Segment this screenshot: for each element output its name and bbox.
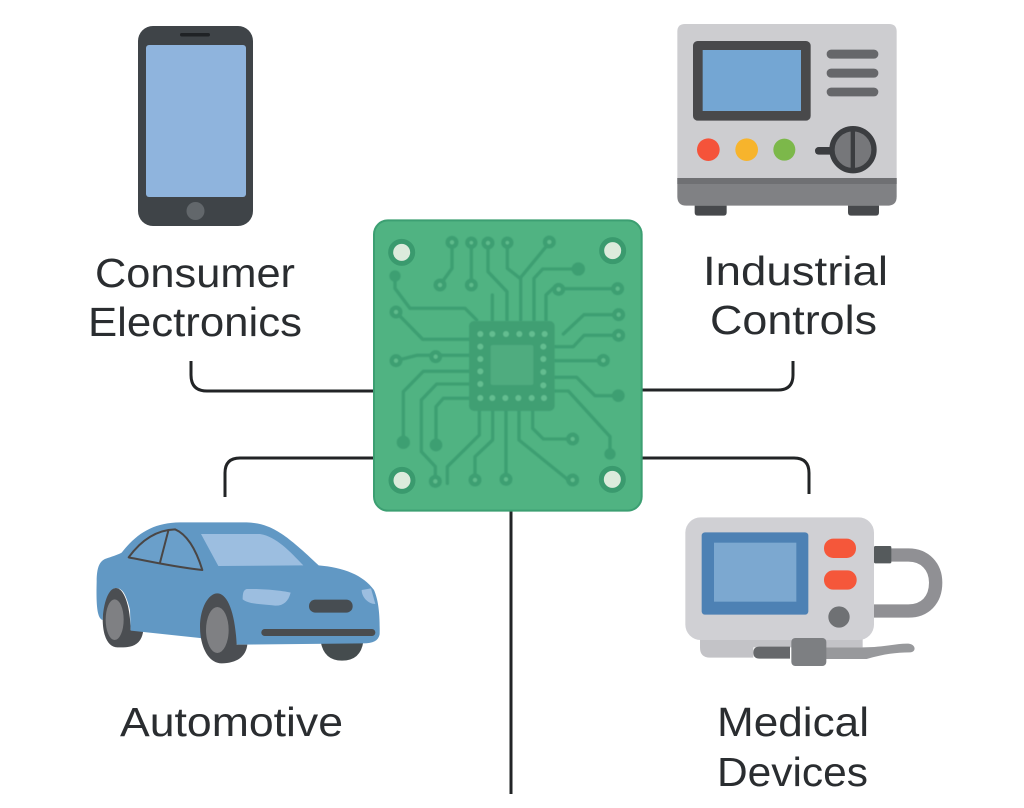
phone screen (146, 45, 246, 197)
phone speaker (180, 33, 210, 36)
chip package (469, 321, 555, 411)
controller base (677, 178, 897, 206)
orange buttons (824, 539, 856, 558)
vent lines (827, 50, 878, 96)
connector lines (191, 361, 809, 794)
trace pads (392, 238, 623, 486)
probe lead (753, 647, 790, 659)
round knob (828, 606, 850, 628)
label: automotive: Automotive (120, 699, 343, 745)
label: industrial controls (703, 248, 888, 343)
cable connector (874, 546, 891, 563)
front wheel (200, 593, 247, 663)
headlight right (362, 588, 375, 604)
label: medical devices (717, 699, 869, 795)
control dial (815, 129, 874, 171)
mounting holes (391, 240, 624, 491)
headlight left (243, 589, 291, 606)
grille (309, 600, 353, 613)
microchip (469, 321, 555, 411)
label: consumer electronics (88, 250, 302, 345)
label: industrial controls: Industrial (703, 248, 888, 294)
circuit traces (395, 243, 618, 483)
label: medical devices: Medical (717, 699, 869, 745)
controller body (677, 24, 897, 178)
connector: bottom vertical (510, 511, 512, 794)
connector: medical devices (642, 458, 809, 494)
icon: medical device (685, 517, 936, 666)
icon: smartphone (138, 26, 253, 226)
rear wheel (103, 588, 143, 647)
central circuit board (374, 220, 642, 511)
probe clip (791, 638, 826, 666)
phone home button (186, 202, 204, 220)
bumper strip (261, 629, 375, 636)
device base (700, 633, 863, 658)
far front wheel (321, 642, 363, 661)
chip contacts (477, 331, 548, 401)
controller feet (695, 206, 727, 216)
side windows (129, 529, 202, 570)
car body (97, 522, 380, 645)
device screen (702, 532, 808, 615)
front hubcap (206, 607, 229, 653)
icon: industrial controller (677, 24, 897, 216)
board body (374, 220, 642, 511)
indicator lights (697, 138, 795, 161)
cable loop (874, 555, 936, 611)
connector: automotive (225, 458, 374, 497)
label: industrial controls: Controls (710, 297, 877, 343)
phone body (138, 26, 253, 226)
solid pads (389, 262, 625, 460)
rear hubcap (106, 599, 124, 640)
connector: industrial controls (642, 361, 793, 390)
controller screen (693, 41, 811, 121)
label: consumer electronics: Consumer (95, 250, 295, 296)
icon: car (97, 522, 380, 663)
windshield (201, 534, 303, 566)
device body (685, 517, 874, 640)
label: consumer electronics: Electronics (88, 299, 302, 345)
label: medical devices: Devices (717, 749, 868, 795)
chip die (491, 345, 533, 385)
connector: consumer electronics (191, 361, 374, 391)
